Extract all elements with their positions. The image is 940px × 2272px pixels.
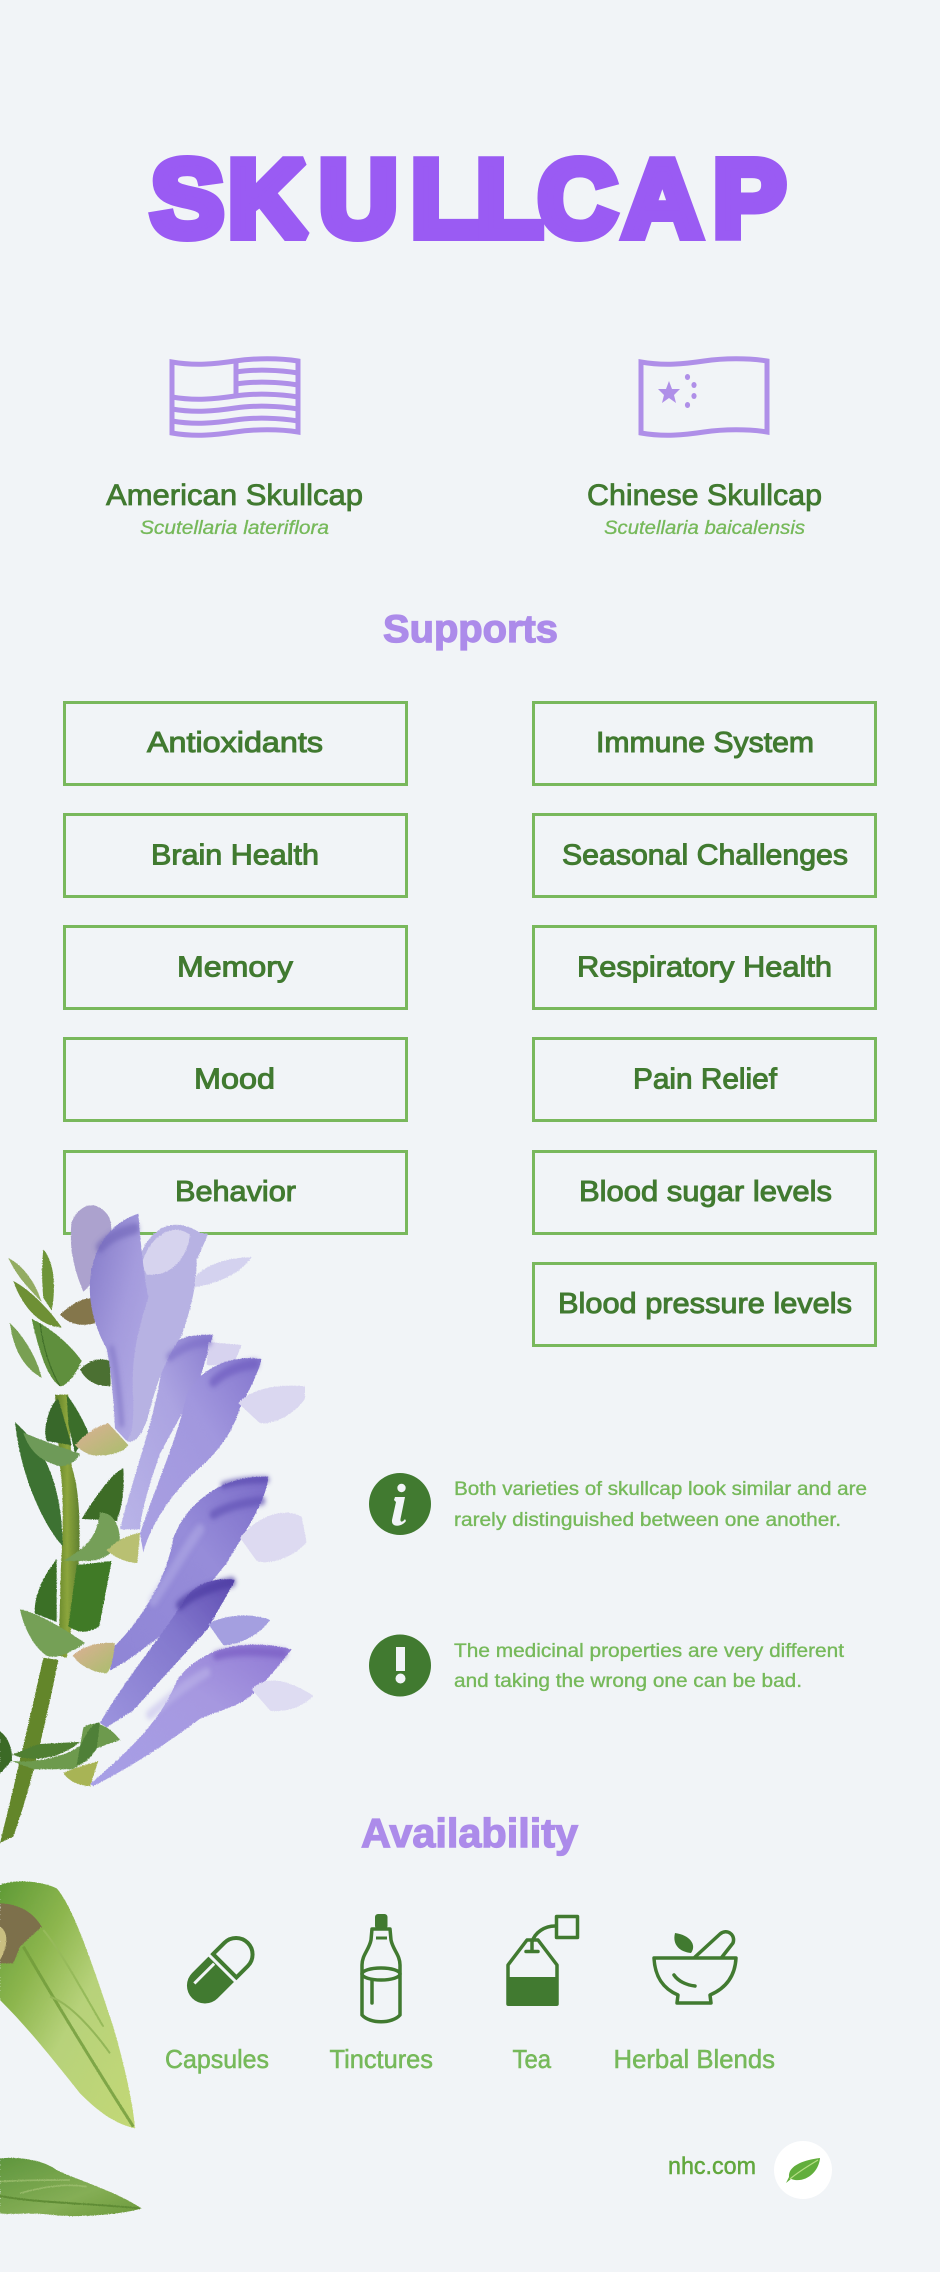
panel: tea xyxy=(506,1916,578,2074)
text: different properties: The medicinal properties are very different xyxy=(454,1640,845,1662)
box: Antioxidants: Antioxidants xyxy=(147,727,323,759)
icon: warning xyxy=(369,1634,431,1696)
heading: American Skullcap: American Skullcap xyxy=(106,479,363,512)
text: different properties xyxy=(454,1640,845,1692)
box: Mood xyxy=(64,1038,406,1120)
image: skullcap flower stalk xyxy=(0,1205,313,1843)
icon: info xyxy=(369,1473,431,1535)
label: Tinctures: Tinctures xyxy=(330,2044,433,2074)
box: Memory xyxy=(64,926,406,1008)
box: Immune System xyxy=(534,702,876,784)
text: similar varieties xyxy=(454,1478,867,1531)
note: similar varieties xyxy=(369,1473,867,1535)
panel: supports right column xyxy=(534,702,876,1346)
image: lower leaf xyxy=(0,1881,135,2128)
heading: Supports: Supports xyxy=(383,608,558,651)
icon: bottle xyxy=(362,1914,400,2022)
title: SKULLCAP xyxy=(151,138,786,260)
box: Seasonal Challenges xyxy=(534,814,876,896)
latin name: Scutellaria lateriflora: Scutellaria lateriflora xyxy=(140,518,329,539)
box: Blood sugar levels xyxy=(534,1152,876,1234)
latin name: Scutellaria baicalensis: Scutellaria baicalensis xyxy=(604,518,806,539)
panel: American skullcap xyxy=(106,359,363,539)
heading: Chinese Skullcap: Chinese Skullcap xyxy=(587,479,822,512)
icon: China flag xyxy=(641,359,767,435)
box: Behavior xyxy=(64,1152,406,1234)
box: Behavior: Behavior xyxy=(175,1176,296,1208)
box: Blood pressure levels xyxy=(534,1264,876,1346)
box: Blood pressure levels: Blood pressure levels xyxy=(558,1288,852,1320)
footer: nhc.com logo xyxy=(668,2141,832,2199)
panel: capsules xyxy=(165,1930,269,2074)
panel: tinctures xyxy=(330,1914,433,2074)
box: Memory: Memory xyxy=(177,952,294,984)
box: Brain Health: Brain Health xyxy=(151,840,319,872)
panel: supports left column xyxy=(64,702,406,1234)
box: Respiratory Health: Respiratory Health xyxy=(577,952,832,984)
box: Pain Relief xyxy=(534,1038,876,1120)
note: different properties xyxy=(369,1634,845,1696)
text: nhc.com: nhc.com xyxy=(668,2153,756,2180)
panel: herbal blends xyxy=(614,1932,775,2074)
image: bottom leaf xyxy=(0,2158,142,2216)
box: Immune System: Immune System xyxy=(596,727,814,759)
box: Mood: Mood xyxy=(194,1064,275,1096)
box: Pain Relief: Pain Relief xyxy=(633,1064,778,1096)
label: Herbal Blends: Herbal Blends xyxy=(614,2044,775,2074)
heading: Availability: Availability xyxy=(361,1810,578,1856)
panel: Chinese skullcap xyxy=(587,359,822,539)
box: Blood sugar levels: Blood sugar levels xyxy=(579,1176,832,1208)
icon: US flag xyxy=(172,359,298,435)
text: similar varieties: Both varieties of skullcap look similar and are xyxy=(454,1478,867,1500)
box: Brain Health xyxy=(64,814,406,896)
box: Antioxidants xyxy=(64,702,406,784)
icon: mortar and pestle xyxy=(654,1932,736,2003)
text: similar varieties: rarely distinguished between one another. xyxy=(454,1509,841,1531)
label: Tea: Tea xyxy=(512,2044,551,2074)
icon: capsule xyxy=(179,1930,260,2011)
box: Respiratory Health xyxy=(534,926,876,1008)
icon: leaf badge xyxy=(774,2141,832,2199)
icon: tea bag xyxy=(506,1916,578,2006)
box: Seasonal Challenges: Seasonal Challenges xyxy=(562,840,848,872)
label: Capsules: Capsules xyxy=(165,2044,269,2074)
text: different properties: and taking the wrong one can be bad. xyxy=(454,1670,802,1692)
